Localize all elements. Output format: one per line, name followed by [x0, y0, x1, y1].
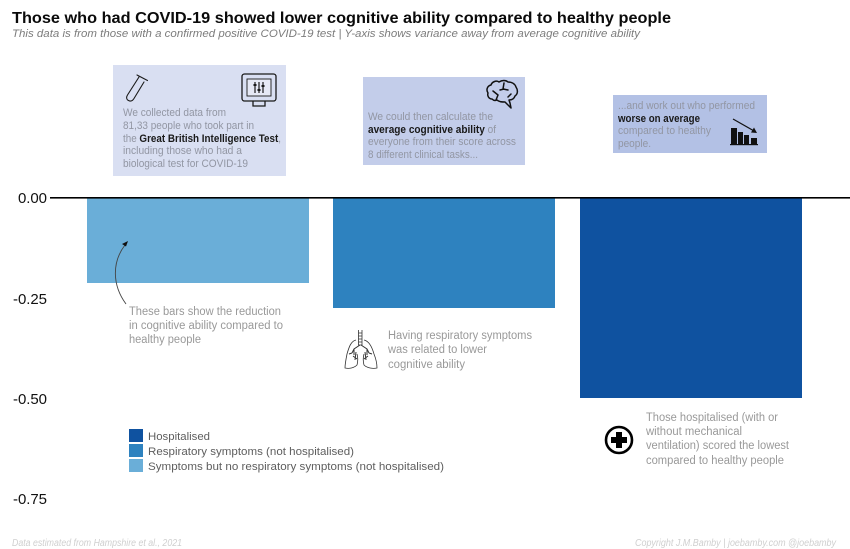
icon: test tube [127, 75, 148, 101]
icon: brain [487, 80, 517, 108]
annotation: respiratory symptoms [387, 330, 532, 371]
text: data collection: including those who had a [123, 145, 243, 157]
text: worse on average: worse on average [617, 113, 700, 125]
text: average calculation: average cognitive ability of [368, 124, 497, 136]
icon: medical cross [606, 427, 632, 453]
text: average calculation [368, 111, 516, 161]
y-axis labels: -0.75 [13, 491, 47, 508]
text: average calculation: We could then calculate the [368, 111, 493, 123]
legend [129, 429, 444, 473]
text: worse on average [617, 100, 755, 150]
text: data collection: biological test for COVID-19 [123, 158, 248, 170]
legend: Hospitalised [148, 431, 210, 443]
panel: data collection [113, 65, 286, 176]
annotation: hospitalised [645, 412, 790, 467]
text: data collection: 81,33 people who took part in [123, 120, 254, 132]
y-axis labels: 0.00 [18, 190, 47, 207]
text: average calculation: everyone from their score across [368, 136, 516, 148]
title: Those who had COVID-19 showed lower cognitive ability compared to healthy people [12, 10, 671, 27]
text: data collection: the Great British Intelligence Test, [123, 133, 281, 145]
zero axis line [50, 197, 850, 199]
y-axis labels: -0.50 [13, 391, 47, 408]
text: average calculation: 8 different clinical tasks... [368, 149, 478, 161]
footer: source: Data estimated from Hampshire et al., 2021 [12, 538, 182, 549]
annotation: hospitalised: compared to healthy people [646, 455, 784, 467]
icon: declining bar chart [730, 119, 758, 145]
annotation: hospitalised: without mechanical [645, 426, 742, 438]
legend: Respiratory symptoms (not hospitalised) [148, 446, 354, 458]
text: data collection [123, 107, 281, 170]
subtitle: This data is from those with a confirmed positive COVID-19 test | Y-axis shows variance away from average cognitive ability [12, 28, 642, 40]
bar: symptoms, no respiratory symptoms [87, 198, 309, 283]
annotation: hospitalised: Those hospitalised (with or [646, 412, 778, 424]
arrow: to first bar [115, 241, 128, 304]
panel: worse on average [613, 95, 767, 153]
icon: monitor with sliders [242, 74, 276, 106]
text: worse on average: ...and work out who performed [618, 100, 755, 112]
annotation: bars show reduction: These bars show the reduction [129, 306, 281, 318]
text: data collection: We collected data from [123, 107, 226, 119]
annotation: bars show reduction: in cognitive ability compared to [129, 320, 283, 332]
y-axis labels [13, 190, 47, 508]
annotation: bars show reduction [129, 306, 283, 346]
bar: respiratory symptoms [333, 198, 555, 308]
bar chart [13, 190, 850, 508]
bar: hospitalised [580, 198, 802, 398]
text: worse on average: people. [618, 138, 651, 150]
icon: lungs [345, 330, 377, 368]
annotation: hospitalised: ventilation) scored the lowest [646, 440, 790, 452]
legend: Symptoms but no respiratory symptoms (not hospitalised) [148, 461, 444, 473]
annotation: respiratory symptoms: was related to lower [387, 344, 487, 356]
annotation: bars show reduction: healthy people [129, 334, 201, 346]
annotation: respiratory symptoms: cognitive ability [388, 359, 465, 371]
annotation: respiratory symptoms: Having respiratory symptoms [388, 330, 532, 342]
y-axis labels: -0.25 [13, 291, 47, 308]
text: worse on average: compared to healthy [618, 125, 711, 137]
panel: average calculation [363, 77, 525, 165]
